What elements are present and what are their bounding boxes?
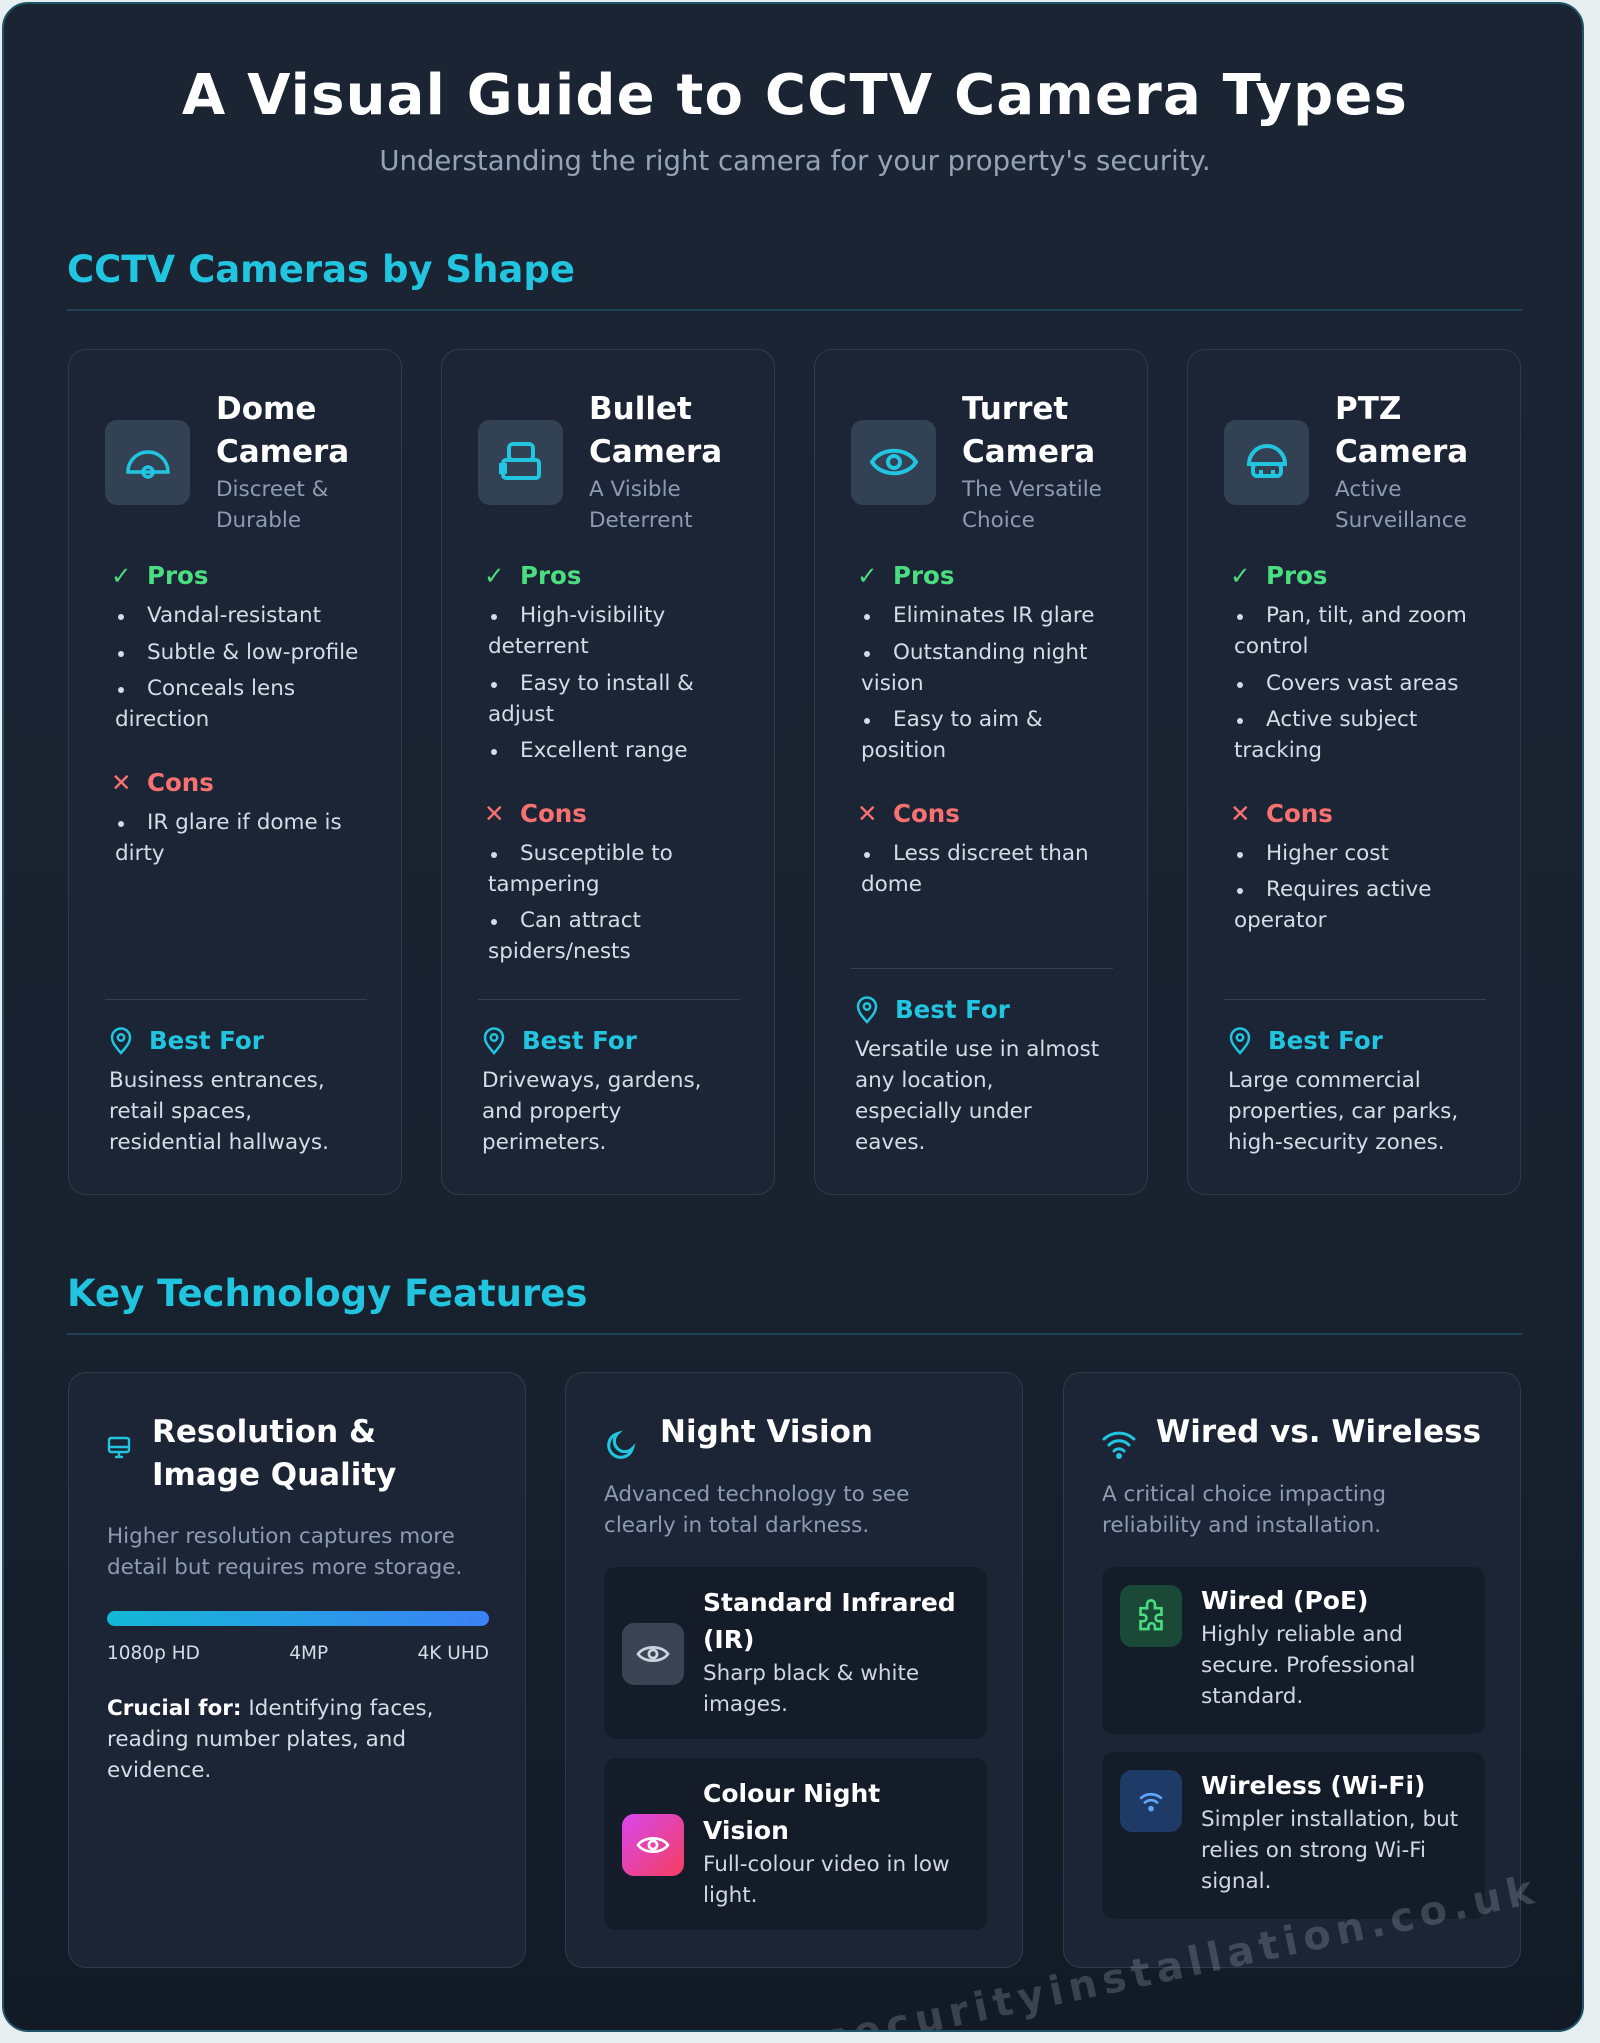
cons: ptz: Cons: [1266, 798, 1333, 828]
subcard: colour night: [604, 1758, 987, 1930]
pros: ptz: Pan, tilt, and zoom control: [1234, 603, 1467, 659]
best for: bullet: Best For: [522, 1026, 637, 1055]
best for: bullet: [478, 999, 740, 1158]
pros: ptz: [1230, 561, 1467, 763]
labels: resolution scale: 4MP: [289, 1643, 328, 1664]
icon: eye gradient: [622, 1814, 684, 1876]
pros: ptz: ✓: [1230, 561, 1251, 590]
card header: turret: The Versatile: [962, 477, 1102, 502]
subcard: wireless: [1102, 1752, 1485, 1919]
cons: bullet: Susceptible to tampering: [488, 840, 673, 896]
pros: ptz: Covers vast areas: [1266, 670, 1459, 696]
pros: turret: Eliminates IR glare: [893, 603, 1094, 628]
panel: wired vs wireless: [1063, 1372, 1521, 1968]
heading: night vision: Night Vision: [660, 1414, 873, 1450]
text: colour night: Colour Night Vision: [703, 1779, 880, 1845]
card header: ptz: PTZ: [1335, 391, 1401, 427]
cons: dome: [111, 768, 342, 866]
card: turret: [814, 349, 1148, 1195]
text: wired: Wired (PoE): [1201, 1586, 1368, 1615]
pros: bullet: Pros: [520, 561, 581, 590]
pros: ptz: Pros: [1266, 561, 1327, 590]
icon: wifi blue: [1120, 1770, 1182, 1832]
labels: resolution scale: [107, 1643, 489, 1664]
pros: dome: Subtle & low-profile: [147, 640, 358, 664]
card: ptz: [1187, 349, 1521, 1195]
cons: ptz: ✕: [1230, 798, 1251, 828]
card header: ptz: Camera: [1335, 434, 1468, 470]
heading: resolution: Resolution &: [152, 1414, 376, 1450]
pros: bullet: Excellent range: [520, 738, 688, 763]
card header: bullet: [478, 391, 722, 533]
best for: dome: Business entrances, retail spaces, residential hallways.: [109, 1068, 329, 1155]
best for: ptz: [1224, 999, 1486, 1158]
pros: dome: ✓: [111, 561, 132, 590]
cons: bullet: Can attract spiders/nests: [488, 908, 641, 964]
subcard: infrared: [604, 1567, 987, 1739]
cons: ptz: Higher cost: [1266, 840, 1389, 866]
text: wireless: Wireless (Wi-Fi): [1201, 1771, 1425, 1800]
labels: resolution scale: 1080p HD: [107, 1643, 200, 1664]
heading: resolution: [152, 1414, 396, 1493]
subcard: wired: [1102, 1567, 1485, 1734]
cons: bullet: [484, 798, 673, 964]
card header: dome: Dome: [216, 391, 316, 427]
card header: bullet: Deterrent: [589, 508, 693, 533]
text: resolution desc: Higher resolution captures more detail but requires more storage.: [107, 1524, 462, 1580]
cons: ptz: [1230, 798, 1431, 933]
icon: monitor: [108, 1436, 130, 1458]
card header: dome: Camera: [216, 434, 349, 470]
text: wired: Highly reliable and secure. Professional standard.: [1201, 1622, 1415, 1709]
pros: turret: Outstanding night vision: [861, 640, 1087, 696]
cons: turret: ✕: [857, 798, 878, 828]
card header: ptz: Active: [1335, 477, 1402, 502]
card: bullet: [441, 349, 775, 1195]
pros: ptz: Active subject tracking: [1234, 707, 1417, 763]
pros: turret: Pros: [893, 561, 954, 590]
best for: turret: Versatile use in almost any location, especially under eaves.: [855, 1037, 1099, 1155]
card header: turret: Camera: [962, 434, 1095, 470]
heading: wired vs wireless: Wired vs. Wireless: [1156, 1414, 1481, 1450]
pros: bullet: [484, 561, 694, 763]
icon: wifi: [1102, 1432, 1136, 1459]
heading: resolution: Image Quality: [152, 1457, 396, 1493]
card header: turret: Choice: [962, 508, 1035, 533]
bar: resolution scale: [107, 1611, 489, 1626]
card header: dome: Durable: [216, 508, 301, 533]
pros: bullet: High-visibility deterrent: [488, 603, 665, 659]
best for: ptz: Large commercial properties, car parks, high-security zones.: [1228, 1068, 1458, 1155]
text: wired desc: A critical choice impacting reliability and installation.: [1102, 1482, 1386, 1538]
pros: dome: Pros: [147, 561, 208, 590]
section heading: shapes: CCTV Cameras by Shape: [67, 248, 575, 291]
best for: ptz: Best For: [1268, 1026, 1383, 1055]
cons: turret: Cons: [893, 798, 960, 828]
card header: bullet: Bullet: [589, 391, 692, 427]
card header: bullet: Camera: [589, 434, 722, 470]
best for: turret: Best For: [895, 995, 1010, 1024]
pros: bullet: ✓: [484, 561, 505, 590]
text: infrared: [703, 1588, 956, 1717]
card header: turret: [851, 391, 1102, 533]
best for: bullet: Driveways, gardens, and property perimeters.: [482, 1068, 702, 1155]
card header: turret: Turret: [962, 391, 1068, 427]
text: infrared: Standard Infrared (IR): [703, 1588, 956, 1654]
pros: turret: Easy to aim & position: [861, 707, 1043, 763]
cons: dome: ✕: [111, 768, 132, 796]
best for: dome: [105, 999, 367, 1158]
icon: puzzle: [1120, 1585, 1182, 1647]
card header: dome: [105, 391, 349, 533]
labels: resolution scale: 4K UHD: [418, 1643, 489, 1664]
text: crucial for: Crucial for: Identifying faces, reading number plates, and evidence.: [107, 1696, 433, 1783]
text: colour night: Full-colour video in low light.: [703, 1852, 950, 1908]
best for: turret: [851, 968, 1113, 1158]
text: wireless: Simpler installation, but relies on strong Wi-Fi signal.: [1201, 1807, 1458, 1894]
pros: turret: ✓: [857, 561, 878, 590]
icon: eye grey: [622, 1623, 684, 1685]
pros: dome: Conceals lens direction: [115, 676, 295, 732]
text: night desc: Advanced technology to see clearly in total darkness.: [604, 1482, 909, 1538]
text: colour night: [703, 1779, 950, 1908]
cons: bullet: ✕: [484, 798, 505, 828]
pros: bullet: Easy to install & adjust: [488, 670, 694, 726]
cons: bullet: Cons: [520, 798, 587, 828]
card header: ptz: Surveillance: [1335, 508, 1467, 533]
panel: resolution: [68, 1372, 526, 1968]
card: dome: [68, 349, 402, 1195]
pros: turret: [857, 561, 1094, 763]
panel: night vision: [565, 1372, 1023, 1968]
cons: dome: Cons: [147, 768, 214, 796]
cons: dome: IR glare if dome is dirty: [115, 810, 342, 866]
section heading: technology: Key Technology Features: [67, 1272, 587, 1315]
icon: moon: [607, 1430, 636, 1459]
cons: turret: [857, 798, 1089, 896]
card header: dome: Discreet &: [216, 477, 328, 502]
pros: dome: [111, 561, 358, 732]
pros: dome: Vandal-resistant: [147, 603, 321, 628]
text: infrared: Sharp black & white images.: [703, 1661, 919, 1717]
cons: turret: Less discreet than dome: [861, 840, 1089, 896]
card header: bullet: A Visible: [589, 477, 681, 502]
best for: dome: Best For: [149, 1026, 264, 1055]
title: A Visual Guide to CCTV Camera Types: [182, 63, 1408, 128]
subtitle: Understanding the right camera for your property's security.: [379, 145, 1211, 177]
card header: ptz: [1224, 391, 1468, 533]
cons: ptz: Requires active operator: [1234, 877, 1431, 933]
